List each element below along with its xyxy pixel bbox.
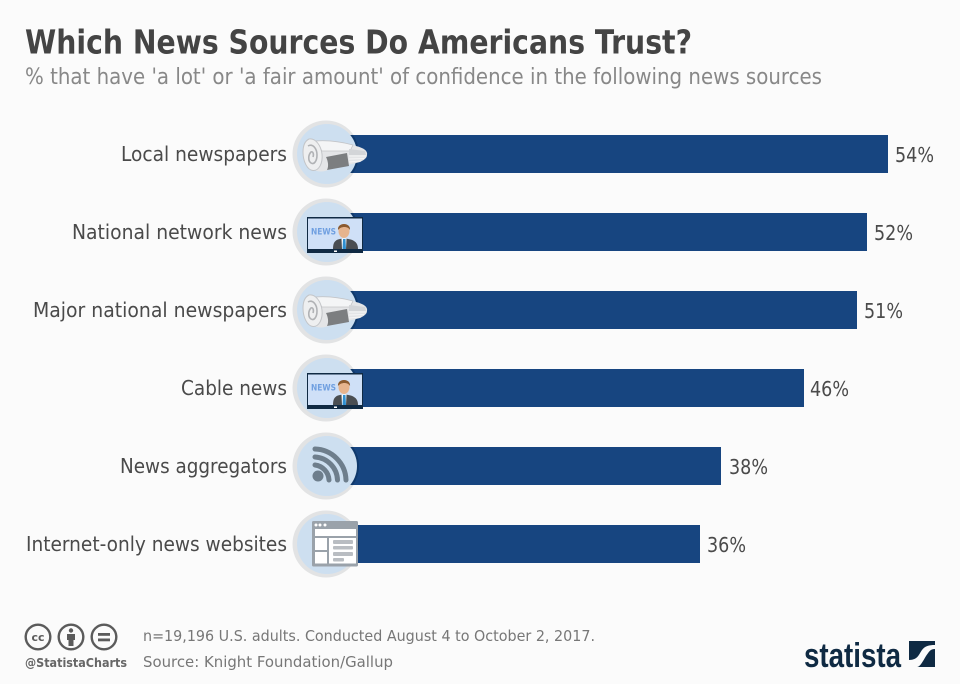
- sample note: n=19,196 U.S. adults. Conducted August 4 to October 2, 2017.: [143, 627, 595, 645]
- icon: attribution: [59, 625, 83, 649]
- row: Major national newspapers: [33, 276, 903, 344]
- value: 38%: 38%: [729, 455, 768, 479]
- row: Cable news: [181, 354, 849, 422]
- icon: newspaper: [303, 139, 367, 172]
- bar: News aggregators 38%: [326, 447, 721, 485]
- bar: Local newspapers 54%: [326, 135, 888, 173]
- value: 51%: 51%: [864, 299, 903, 323]
- label: Local newspapers: Local newspapers: [121, 142, 287, 166]
- logo: statista: statista: [804, 637, 902, 675]
- title: Which News Sources Do Americans Trust?: [25, 22, 692, 62]
- bar: Major national newspapers 51%: [326, 291, 857, 329]
- label: Major national newspapers: Major national newspapers: [33, 298, 287, 322]
- value: 46%: 46%: [810, 377, 849, 401]
- row: Internet-only news websites: [26, 510, 746, 578]
- bar: Internet-only news websites 36%: [326, 525, 700, 563]
- row: National network news: [72, 198, 913, 266]
- icon: web page: [312, 521, 358, 566]
- label: News aggregators: News aggregators: [120, 454, 287, 478]
- icon: no derivatives: [92, 625, 116, 649]
- label: Internet-only news websites: Internet-only news websites: [26, 532, 287, 556]
- label: Cable news: Cable news: [181, 376, 287, 400]
- icon: TV news anchor: [307, 217, 363, 253]
- icon: newspaper: [303, 295, 367, 328]
- source: Source: Knight Foundation/Gallup: [143, 653, 393, 671]
- value: 54%: 54%: [895, 143, 934, 167]
- row: News aggregators: [120, 432, 768, 500]
- handle: @StatistaCharts: [25, 656, 127, 670]
- license icons: [26, 625, 116, 649]
- icon: RSS feed: [312, 449, 346, 482]
- subtitle: % that have 'a lot' or 'a fair amount' of confidence in the following news sources: [25, 65, 822, 90]
- label: National network news: National network news: [72, 220, 287, 244]
- icon: TV news anchor: [307, 373, 363, 409]
- value: 36%: 36%: [707, 533, 746, 557]
- bar: Cable news 46%: [326, 369, 804, 407]
- value: 52%: 52%: [874, 221, 913, 245]
- row: Local newspapers: [121, 120, 934, 188]
- icon: creative commons: cc: [31, 631, 45, 644]
- bar: National network news 52%: [326, 213, 867, 251]
- logo mark: [909, 641, 935, 667]
